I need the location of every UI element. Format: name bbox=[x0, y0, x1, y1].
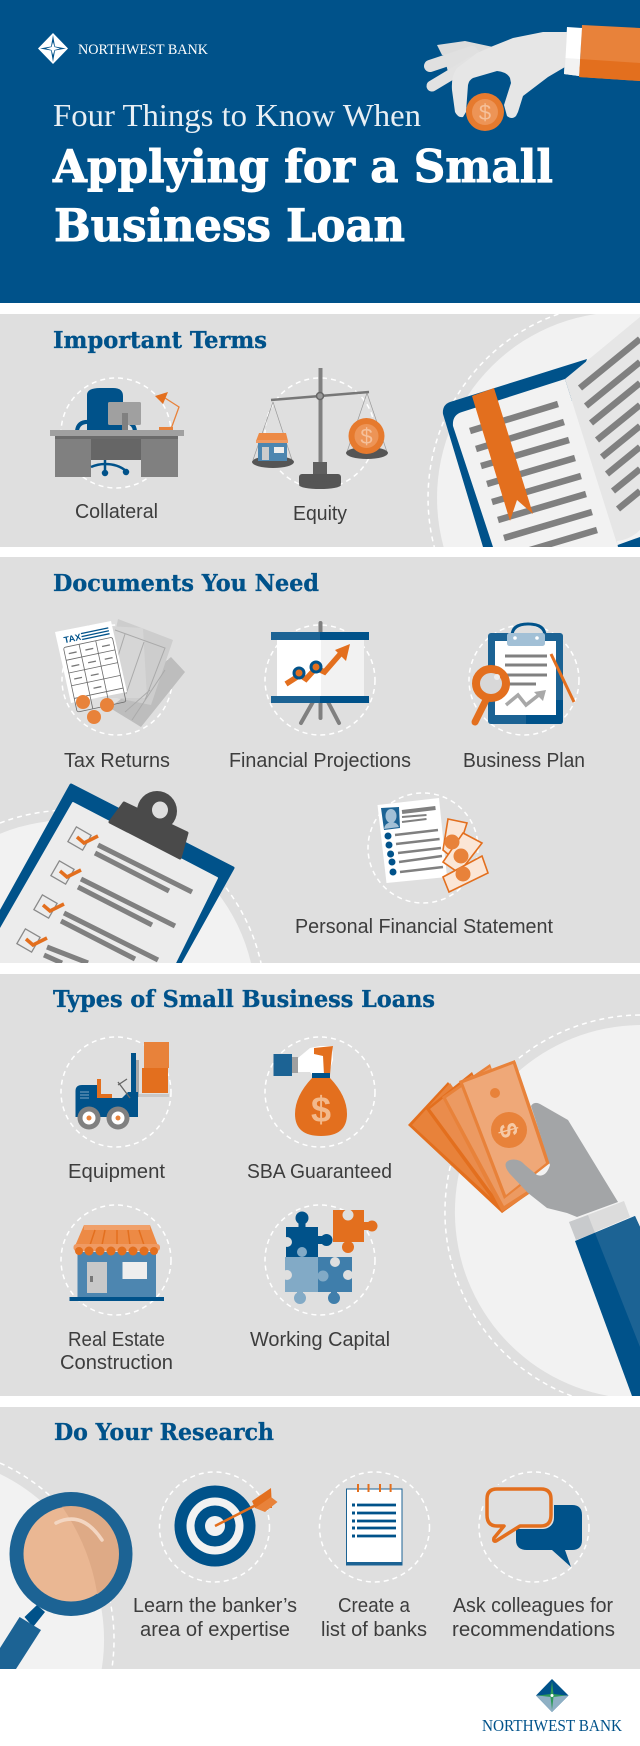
label: ask colleagues for recommendations bbox=[452, 1594, 615, 1641]
panel: important terms bbox=[0, 314, 640, 556]
icon: speech bubbles bbox=[479, 1472, 589, 1582]
icon: target bbox=[160, 1472, 278, 1582]
label: collateral: Collateral bbox=[75, 500, 158, 523]
label: learn the banker's area of expertise bbox=[133, 1594, 297, 1641]
icon: business plan bbox=[469, 624, 579, 735]
label: working capital: Working Capital bbox=[250, 1328, 390, 1351]
icon: storefront real estate bbox=[61, 1205, 171, 1315]
label: financial projections: Financial Projections bbox=[229, 749, 411, 772]
label: ask colleagues for recommendations: Ask colleagues for bbox=[453, 1594, 613, 1617]
logo: Northwest Bank white: NORTHWEST BANK bbox=[78, 42, 208, 58]
label: equipment: Equipment bbox=[68, 1160, 165, 1183]
label: create a list of banks: list of banks bbox=[321, 1618, 427, 1641]
label: real estate construction: Construction bbox=[60, 1351, 173, 1374]
icon: hand holding cash: $ bbox=[493, 1120, 523, 1141]
label: real estate construction: Real Estate bbox=[68, 1328, 165, 1351]
header panel bbox=[0, 0, 640, 303]
label: ask colleagues for recommendations: recommendations bbox=[452, 1618, 615, 1641]
icon: forklift equipment bbox=[61, 1037, 171, 1147]
label: SBA guaranteed: SBA Guaranteed bbox=[247, 1160, 392, 1183]
icon: balance scale equity: $ bbox=[360, 424, 373, 449]
label: learn the banker's area of expertise: Learn the banker’s bbox=[133, 1594, 297, 1617]
title line 1: Four Things to Know When bbox=[53, 97, 421, 133]
label: real estate construction bbox=[60, 1328, 173, 1374]
icon: financial projections bbox=[265, 623, 375, 735]
panel: documents you need bbox=[0, 557, 640, 963]
label: business plan: Business Plan bbox=[463, 749, 585, 772]
footer logo: Northwest Bank: NORTHWEST BANK bbox=[482, 1716, 622, 1735]
footer logo: Northwest Bank bbox=[482, 1679, 622, 1735]
title line 2: Applying for a Small bbox=[52, 140, 553, 193]
label: learn the banker's area of expertise: area of expertise bbox=[140, 1618, 290, 1641]
title line 3: Business Loan bbox=[54, 199, 405, 252]
icon: puzzle working capital bbox=[265, 1205, 378, 1315]
panel: types of small business loans bbox=[0, 974, 640, 1396]
icon: magnifying glass bbox=[0, 1463, 132, 1669]
icon: open book bbox=[428, 314, 640, 556]
label: create a list of banks: Create a bbox=[338, 1594, 411, 1617]
icon: notepad bbox=[320, 1472, 430, 1582]
icon: hand holding coin bbox=[430, 25, 640, 131]
label: equity: Equity bbox=[293, 502, 348, 525]
heading: types of small business loans: Types of Small Business Loans bbox=[53, 986, 435, 1013]
icon: desk collateral bbox=[50, 378, 184, 488]
icon: tax returns: TAX bbox=[63, 632, 82, 645]
icon: hand holding coin: $ bbox=[479, 100, 491, 125]
label: personal financial statement: Personal Financial Statement bbox=[295, 915, 553, 938]
heading: do your research: Do Your Research bbox=[54, 1419, 274, 1446]
icon: balance scale equity bbox=[252, 368, 388, 489]
panel: do your research bbox=[0, 1407, 640, 1669]
logo: Northwest Bank white bbox=[38, 33, 208, 64]
icon: money bag SBA guaranteed: $ bbox=[311, 1089, 331, 1130]
label: tax returns: Tax Returns bbox=[64, 749, 170, 772]
heading: documents you need: Documents You Need bbox=[53, 570, 319, 597]
icon: tax returns bbox=[55, 619, 185, 735]
icon: personal financial statement bbox=[368, 793, 488, 903]
icon: clipboard checklist bbox=[0, 785, 261, 963]
label: create a list of banks bbox=[321, 1594, 427, 1641]
icon: hand holding cash bbox=[408, 1015, 640, 1396]
heading: important terms: Important Terms bbox=[53, 327, 267, 354]
icon: money bag SBA guaranteed bbox=[265, 1037, 375, 1147]
